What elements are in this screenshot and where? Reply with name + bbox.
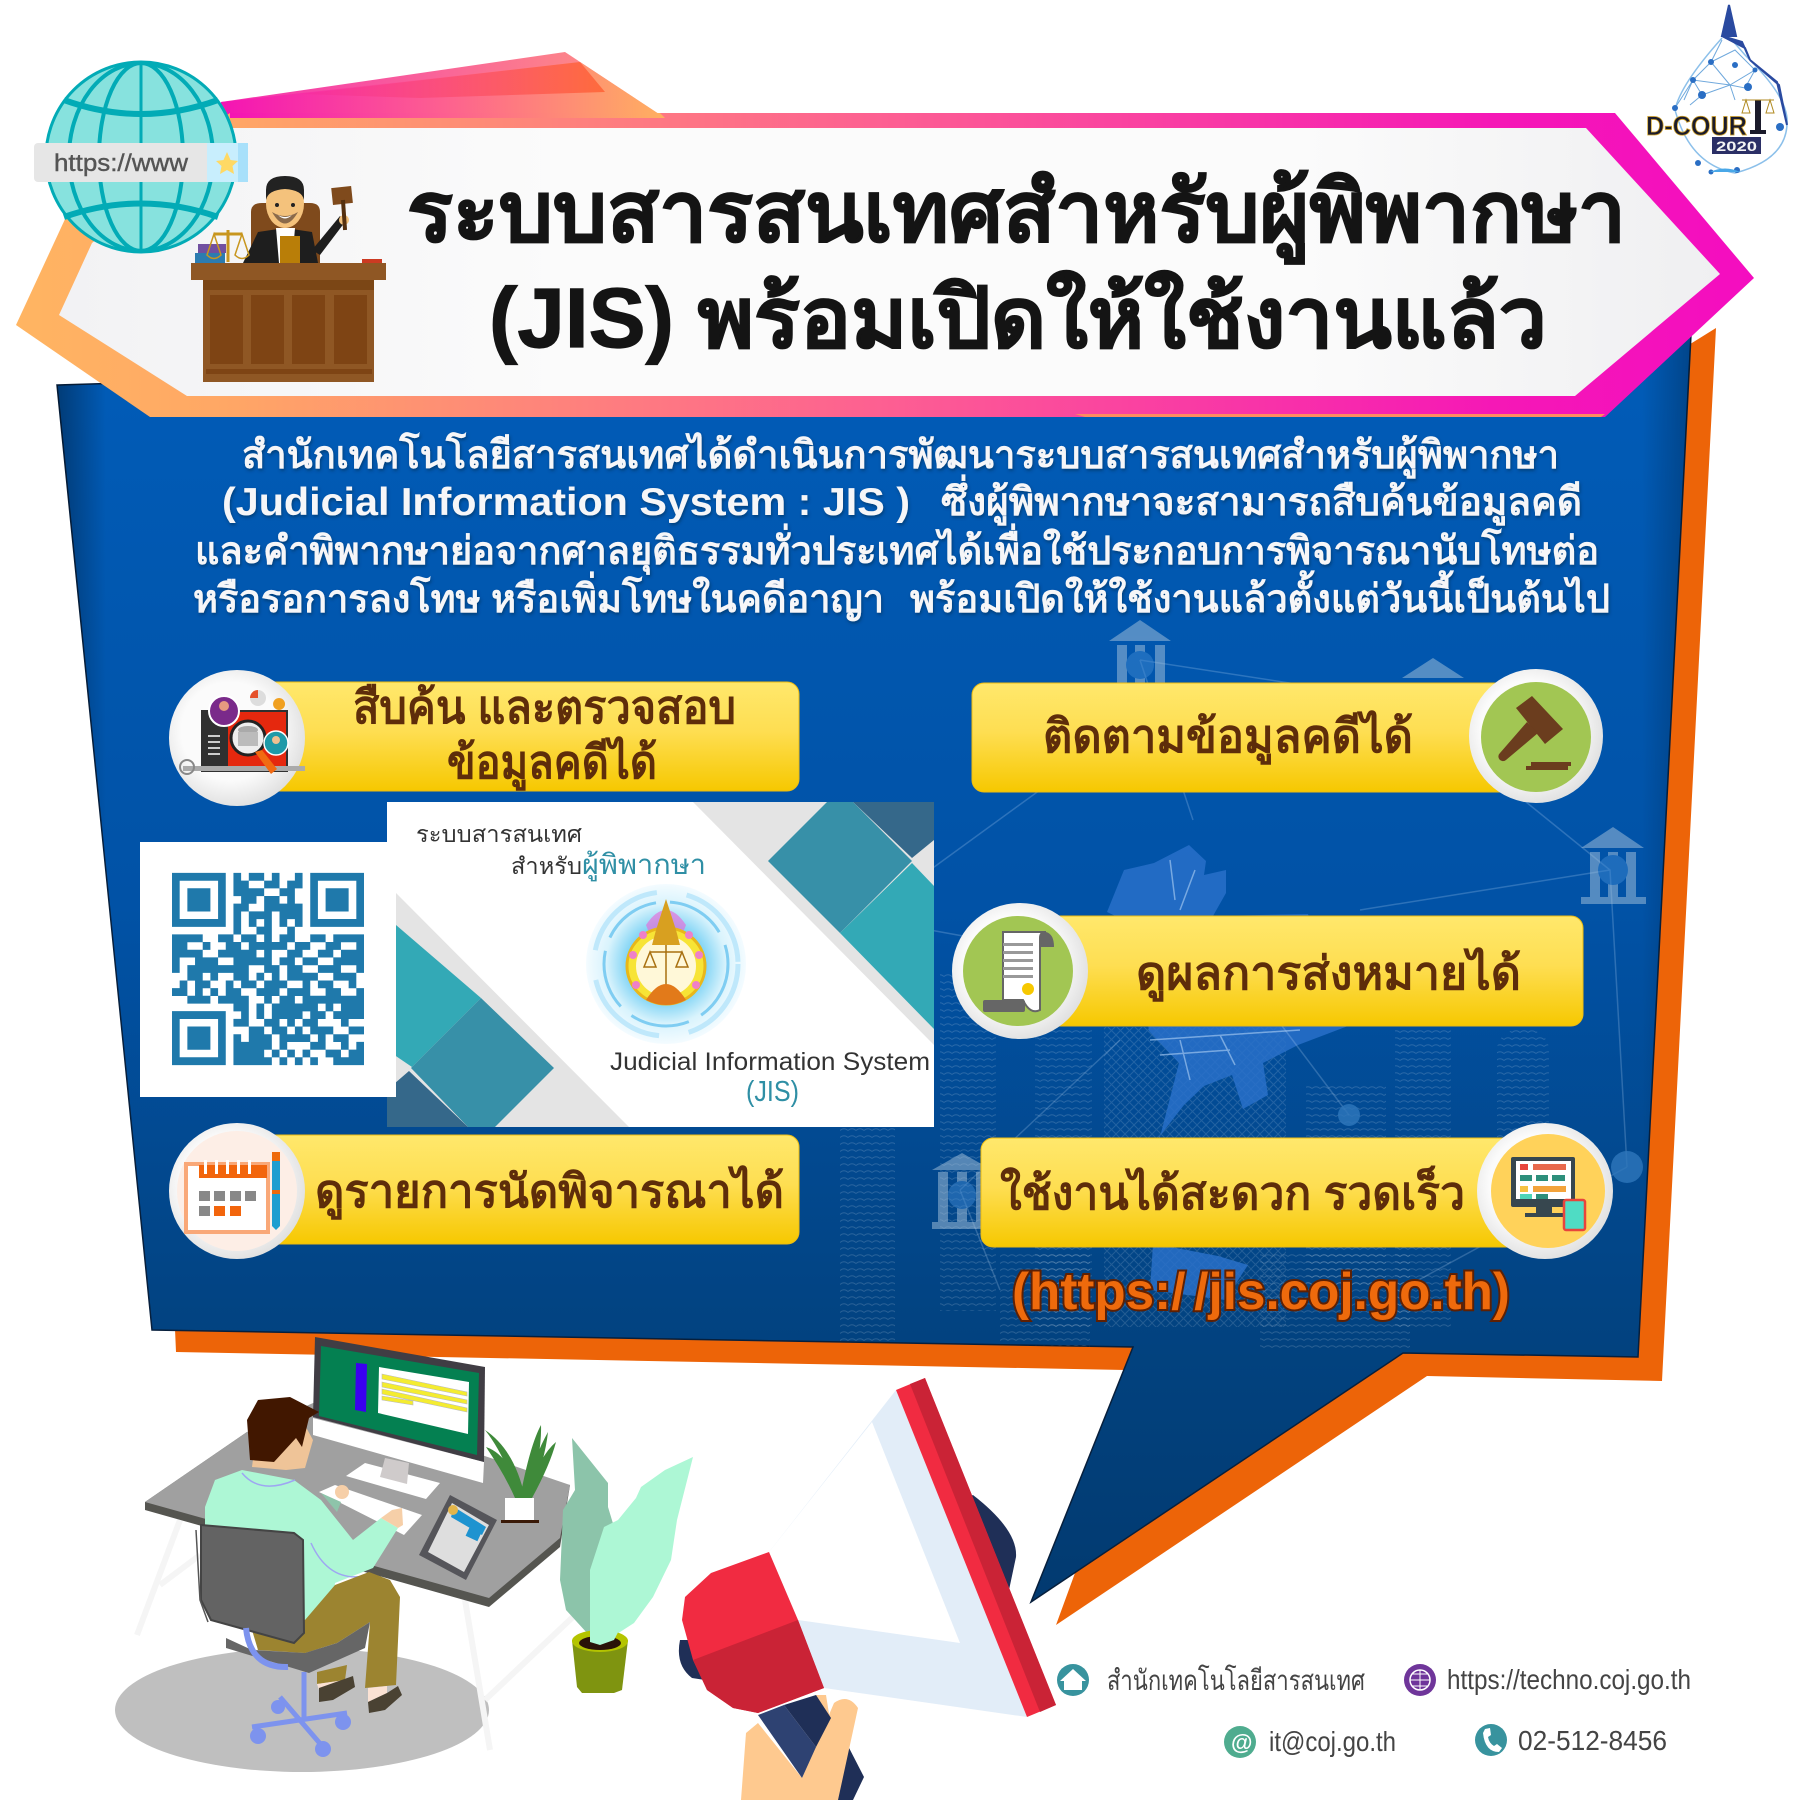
- title: (JIS) พร้อมเปิดให้ใช้งานแล้ว: [489, 270, 1547, 365]
- button: view court schedule: [169, 1123, 799, 1259]
- bell: [682, 1552, 824, 1713]
- logo: D-Court 2020: 2020: [1716, 138, 1757, 154]
- hands: [335, 1485, 403, 1528]
- QR code: [140, 842, 396, 1097]
- button: easy and fast: ใช้งานได้สะดวก รวดเร็ว: [1000, 1165, 1465, 1219]
- panel: orange speech bubble shadow: [175, 328, 1716, 1625]
- text: card system name: Judicial Information System: [610, 1048, 930, 1076]
- desk legs: [137, 1520, 575, 1750]
- illustration: megaphone: [679, 1378, 1056, 1800]
- background network: map, buildings and courthouses: [840, 620, 1646, 1357]
- icon: scroll: [952, 903, 1088, 1039]
- logo: D-Court 2020: D-COUR: [1646, 111, 1747, 141]
- button: search and verify case data: สืบค้น และตรวจสอบ: [353, 681, 736, 733]
- title: ระบบสารสนเทศสำหรับผู้พิพากษา: [407, 165, 1626, 265]
- text: card heading: สำหรับ: [511, 853, 582, 879]
- icon: court emblem: [586, 884, 746, 1044]
- chair base: [246, 1628, 351, 1757]
- button: view court schedule: ดูรายการนัดพิจารณาได้: [315, 1165, 784, 1220]
- text block: description: หรือรอการลงโทษ หรือเพิ่มโทษในคดีอาญา: [193, 571, 884, 622]
- text block: description: พร้อมเปิดให้ใช้งานแล้วตั้งแต่วันนี้เป็นต้นไป: [910, 570, 1610, 621]
- footer: office name: [1057, 1664, 1365, 1696]
- title: [407, 165, 1626, 365]
- icon: judge at bench: [191, 176, 386, 382]
- text: card heading: ระบบสารสนเทศ: [416, 821, 582, 847]
- desk: [145, 1400, 570, 1607]
- logo: D-Court 2020: [1646, 5, 1787, 174]
- text block: description: สำนักเทคโนโลยีสารสนเทศได้ดำเนินการพัฒนาระบบสารสนเทศสำหรับผู้พิพากษา: [242, 432, 1559, 479]
- icon: gavel: [1469, 669, 1603, 803]
- icon: data search laptop: [169, 670, 305, 806]
- text: website url: (https://jis.coj.go.th): [1012, 1263, 1510, 1321]
- footer: email: @: [1231, 1730, 1252, 1755]
- button: easy and fast: [981, 1123, 1613, 1259]
- panel: blue speech bubble: [57, 335, 1691, 1602]
- text: card heading: ผู้พิพากษา: [582, 849, 706, 882]
- footer: phone: 02-512-8456: [1518, 1725, 1667, 1756]
- button: track case data: ติดตามข้อมูลคดีได้: [1043, 710, 1413, 765]
- pants: [252, 1572, 400, 1688]
- icon: globe with url bar: [34, 61, 248, 253]
- rim: [896, 1378, 1056, 1717]
- text block: description: และคำพิพากษาย่อจากศาลยุติธรรมทั่วประเทศได้เพื่อใช้ประกอบการพิจารณานับโทษต่อ: [195, 523, 1599, 575]
- handle and hand: [835, 1740, 864, 1800]
- text: card heading: [416, 821, 706, 882]
- text block: description: (Judicial Information System : JIS ): [222, 481, 910, 524]
- cone: [769, 1390, 1027, 1717]
- panel: JIS card image: [387, 802, 934, 1127]
- footer: email: [1224, 1726, 1396, 1758]
- illustration: person working at desk: [115, 1337, 693, 1772]
- socks and shoes: [317, 1676, 402, 1713]
- monitor: [313, 1337, 485, 1499]
- icon: monitor and phone: [1477, 1123, 1613, 1259]
- text: card system name: [610, 1048, 930, 1108]
- tablet: [419, 1495, 497, 1580]
- button: search and verify case data: ข้อมูลคดีได้: [447, 736, 657, 791]
- button: view summons results: [952, 903, 1583, 1039]
- panel: title banner frame: [16, 52, 1754, 417]
- shirt: [205, 1470, 398, 1625]
- courthouse icons: [932, 620, 1646, 1229]
- text: card system name: (JIS): [746, 1076, 799, 1108]
- chair seat: [226, 1622, 370, 1673]
- keyboard: [319, 1485, 422, 1535]
- text block: description: [193, 432, 1610, 622]
- chair back: [201, 1525, 304, 1643]
- button: search and verify case data: [169, 670, 799, 806]
- title background: [59, 128, 1720, 396]
- scales and books: [195, 230, 249, 263]
- large potted plant: [560, 1438, 693, 1693]
- floor shadow: [115, 1648, 489, 1772]
- button: view summons results: ดูผลการส่งหมายได้: [1136, 947, 1521, 1002]
- text block: description: ซึ่งผู้พิพากษาจะสามารถสืบค้นข้อมูลคดี: [941, 474, 1582, 526]
- footer: office name: สำนักเทคโนโลยีสารสนเทศ: [1107, 1664, 1365, 1696]
- footer: website: https://techno.coj.go.th: [1447, 1664, 1691, 1695]
- button: track case data: [972, 669, 1603, 803]
- icon: globe with url bar: https://www: [54, 150, 189, 177]
- small plant: [485, 1425, 556, 1523]
- icon: calendar: [169, 1123, 305, 1259]
- footer: email: it@coj.go.th: [1269, 1726, 1396, 1757]
- head: [252, 1420, 313, 1470]
